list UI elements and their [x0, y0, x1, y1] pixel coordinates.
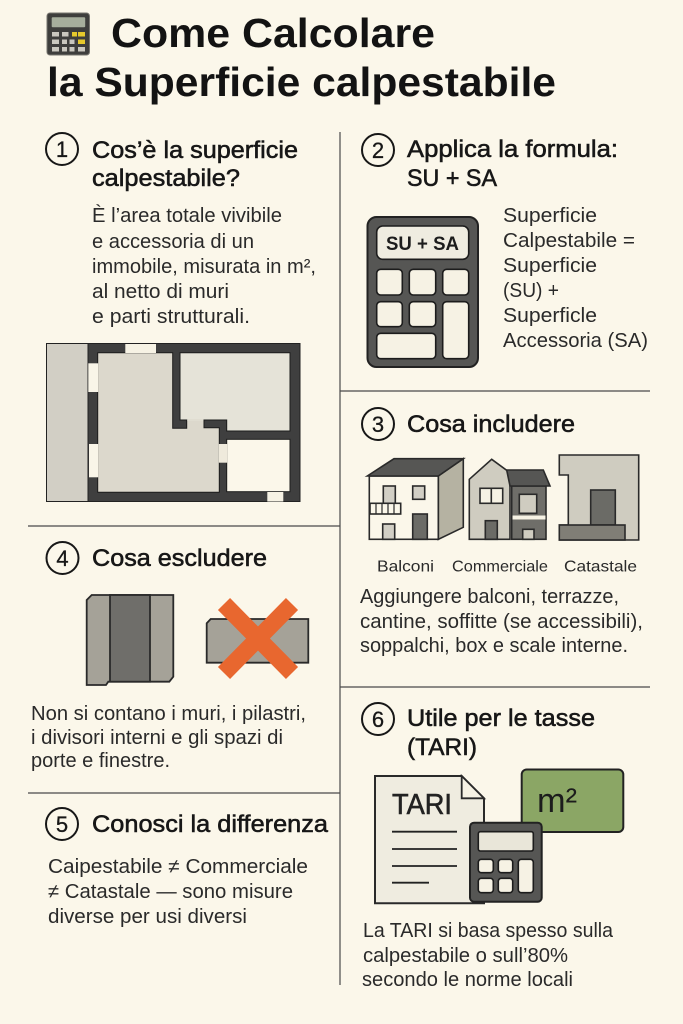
title: la Superficie calpestabile: [47, 59, 556, 105]
text 3: [360, 586, 643, 657]
icon: small calculator: [470, 823, 542, 902]
panel: 5 conosci la differenza: [46, 808, 329, 928]
text 4: porte e finestre.: [31, 750, 170, 772]
icon: crossed wall: [207, 604, 308, 673]
number badge 1: 1: [56, 137, 68, 162]
icon: pillar: [87, 595, 173, 685]
heading 2: [407, 136, 618, 192]
panel: 6 tasse TARI: [362, 703, 623, 991]
panel: 1 definizione: [46, 133, 316, 502]
text 4: i divisori interni e gli spazi di: [31, 727, 283, 749]
number badge 6: [362, 703, 394, 735]
text 1: e accessoria di un: [92, 231, 254, 253]
number badge 3: [362, 408, 394, 440]
text 4: [31, 703, 306, 772]
icon: calculator SU + SA: SU + SA: [386, 234, 459, 255]
heading 3: Cosa includere: [407, 411, 575, 438]
floor plan: [46, 344, 300, 502]
text 5: diverse per usi diversi: [48, 906, 247, 928]
text 1: e parti strutturali.: [92, 306, 250, 328]
text 1: È l’area totale vivibile: [92, 204, 282, 227]
heading 2: SU + SA: [407, 165, 497, 192]
text 2: Superficie: [503, 255, 597, 277]
title: [47, 10, 556, 105]
text 3: Aggiungere balconi, terrazze,: [360, 586, 619, 608]
heading 4: Cosa escludere: [92, 545, 267, 572]
text 6: secondo le norme locali: [362, 969, 573, 991]
icon: commercial building: [469, 459, 550, 539]
number badge 5: 5: [56, 812, 68, 837]
number badge 1: [46, 133, 78, 165]
text 2: (SU) +: [503, 280, 559, 302]
labels: Catastale: [564, 558, 637, 576]
icon: cadastral plan: [559, 455, 639, 540]
icon: house with balcony: [367, 459, 463, 539]
text 6: La TARI si basa spesso sulla: [363, 920, 614, 942]
number badge 5: [46, 808, 78, 840]
heading 6: Utile per le tasse: [407, 705, 595, 732]
heading 6: (TARI): [407, 734, 477, 761]
heading 6: [407, 705, 595, 761]
labels: [377, 558, 637, 576]
heading 1: [92, 137, 298, 192]
icon: TARI document: TARI: [392, 789, 452, 821]
number badge 6: 6: [372, 707, 384, 732]
heading 1: calpestabile?: [92, 165, 240, 192]
text 2: Superficie: [503, 205, 597, 227]
text 3: soppalchi, box e scale interne.: [360, 635, 628, 657]
icon: m2 card: m²: [537, 782, 577, 820]
text 4: Non si contano i muri, i pilastri,: [31, 703, 306, 725]
panel: 4 cosa escludere: [31, 542, 308, 772]
icon: calculator SU + SA: [368, 217, 478, 367]
text 1: immobile, misurata in m²,: [92, 256, 316, 278]
number badge 3: 3: [372, 412, 384, 437]
number badge 2: 2: [372, 138, 384, 163]
text 2: Superficle: [503, 305, 597, 327]
heading 5: Conosci la differenza: [92, 811, 329, 838]
text 6: calpestabile o sull’80%: [363, 945, 568, 967]
text 5: ≠ Catastale — sono misure: [48, 881, 293, 903]
icon: TARI document: [375, 776, 484, 903]
text 2: Calpestabile =: [503, 230, 635, 252]
text 1: al netto di muri: [92, 281, 229, 303]
number badge 2: [362, 134, 394, 166]
text 5: [48, 856, 308, 928]
heading 2: Applica la formula:: [407, 136, 618, 163]
text 5: Caipestabile ≠ Commerciale: [48, 856, 308, 878]
panel: 2 formula: [362, 134, 648, 367]
text 1: [92, 204, 316, 328]
icon: m2 card: [522, 770, 623, 832]
number badge 4: 4: [56, 546, 69, 571]
labels: Commerciale: [452, 558, 548, 576]
number badge 4: [46, 542, 78, 574]
text 6: [362, 920, 614, 991]
text 2: Accessoria (SA): [503, 330, 648, 352]
text 3: cantine, soffitte (se accessibili),: [360, 611, 643, 633]
text 2: [503, 205, 648, 352]
heading 1: Cos’è la superficie: [92, 137, 298, 164]
panel: 3 cosa includere: [360, 408, 643, 657]
labels: Balconi: [377, 558, 434, 576]
title: Come Calcolare: [111, 10, 435, 56]
icon: calculator: [47, 13, 90, 55]
dividers: [28, 132, 650, 985]
